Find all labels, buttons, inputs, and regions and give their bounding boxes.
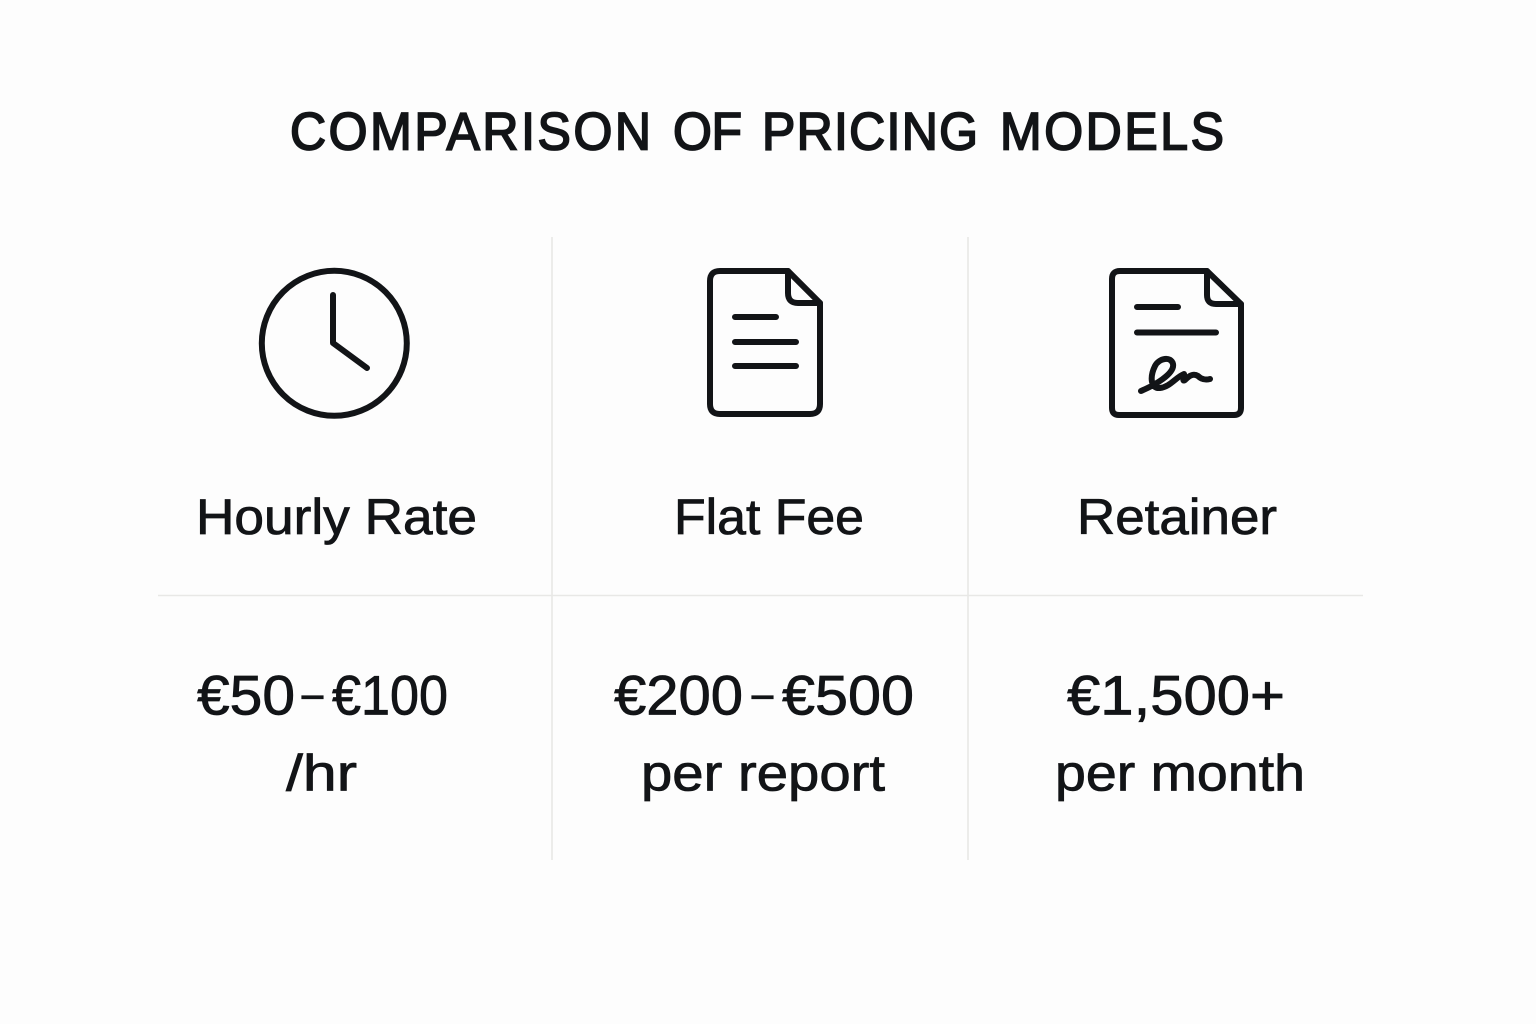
label: flat fee: Flat Fee <box>674 489 864 545</box>
price: retainer: €1,500+ <box>1067 664 1285 726</box>
price: flat fee: €500 <box>782 664 914 726</box>
label: retainer: Retainer <box>1077 489 1277 545</box>
price: hourly rate <box>197 664 448 802</box>
price: retainer <box>1055 664 1305 802</box>
price: retainer: per month <box>1055 744 1305 802</box>
icon: document <box>710 271 820 414</box>
price: flat fee: €200 <box>614 664 743 726</box>
title: MODELS <box>1000 102 1224 161</box>
label: hourly rate: Hourly Rate <box>196 489 477 545</box>
title: COMPARISON <box>290 102 651 161</box>
price: flat fee <box>614 664 914 802</box>
icon: clock <box>262 271 407 416</box>
icon: signed contract <box>1112 271 1241 415</box>
price: hourly rate: €100 <box>332 664 448 726</box>
price: hourly rate: – <box>302 674 324 716</box>
panel: flat fee <box>614 271 914 802</box>
price: hourly rate: €50 <box>197 664 295 726</box>
price: flat fee: – <box>752 674 774 716</box>
title: PRICING <box>762 102 978 161</box>
price: flat fee: per report <box>641 744 885 802</box>
panel: retainer <box>1055 271 1305 802</box>
price: hourly rate: /hr <box>286 744 357 802</box>
panel: hourly rate <box>196 271 477 802</box>
title: OF <box>673 102 742 161</box>
title <box>290 102 1224 161</box>
